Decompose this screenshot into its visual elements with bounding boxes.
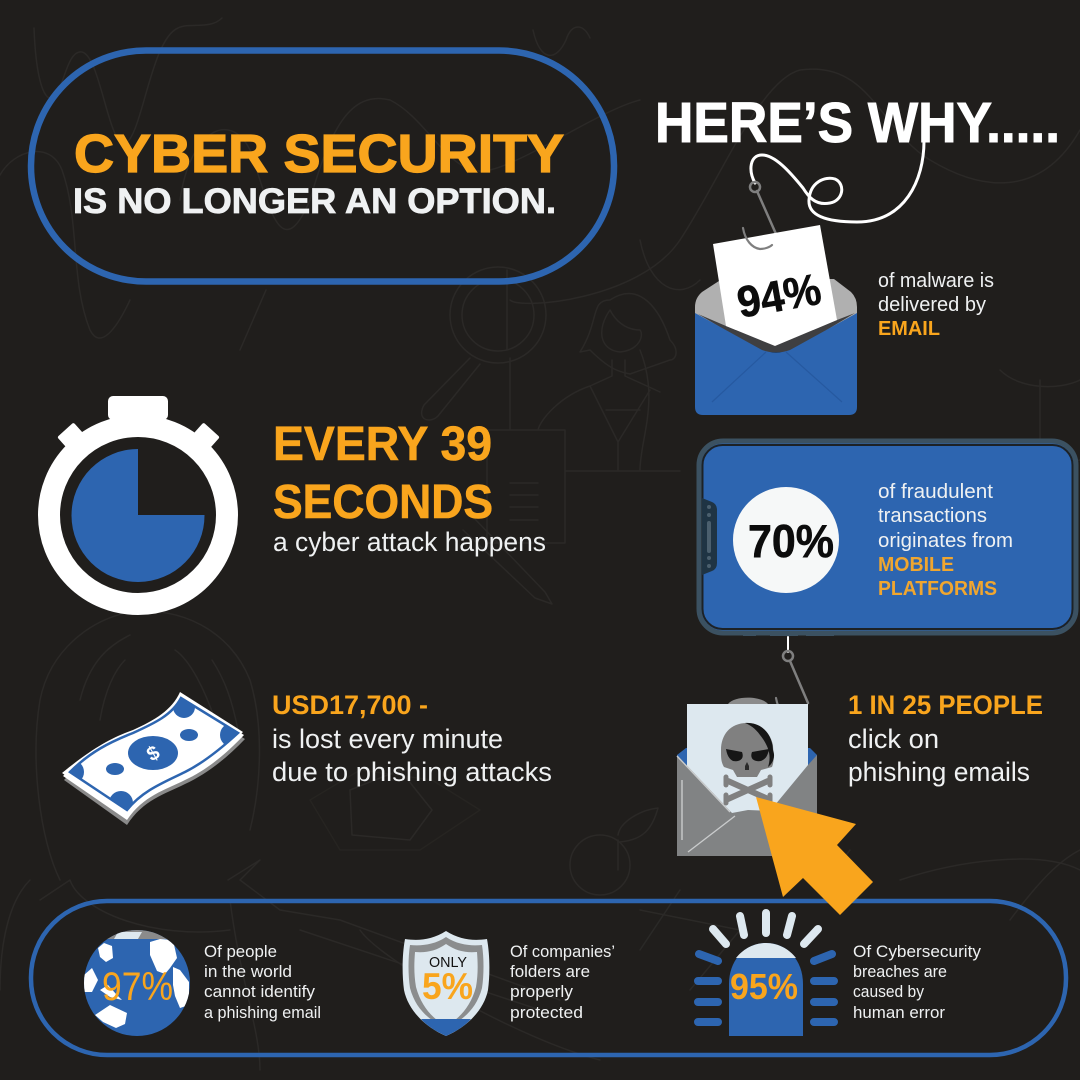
stat: shield 5% [403,931,615,1036]
caption: human error: human error [853,1003,945,1022]
heading: here's why: HERE’S WHY..... [655,91,1060,155]
title pill [31,50,614,282]
icon: shield [403,931,489,1036]
icon: cursor arrow [756,797,873,915]
icon: phone frame [699,441,1076,635]
stat: 70% [733,487,839,593]
email caption: of malware is [878,270,994,292]
stat: 94%: 94% [733,265,825,328]
fishing line and hook [750,141,924,234]
caption: companies [510,942,615,1022]
mobile caption: MOBILE [878,554,954,576]
dollar symbol: $ [143,742,164,766]
label: only: ONLY [429,954,467,971]
caption: human error: Of Cybersecurity [853,942,981,961]
frequency headline: EVERY 39 [273,418,492,471]
caption: people [204,942,321,1022]
value: 5%: 5% [422,966,473,1007]
panel: phishing money [60,690,552,825]
value: 95%: 95% [730,966,798,1007]
caption: people: in the world [204,962,292,981]
mobile caption: of fraudulent [878,481,993,503]
caption: people: cannot identify [204,982,315,1001]
icon: globe [84,930,190,1036]
money headline: USD17,700 - [272,690,428,720]
icon: banknotes [60,692,245,825]
mobile caption: PLATFORMS [878,578,997,600]
frequency caption: a cyber attack happens [273,527,546,557]
caption: human error [853,942,981,1022]
email caption [878,270,994,340]
mobile caption: transactions [878,505,987,527]
caption: human error: breaches are [853,962,947,981]
email caption: EMAIL [878,318,940,340]
icon: alarm beacon [698,913,834,1036]
title sub line: IS NO LONGER AN OPTION. [73,182,556,221]
caption: companies: folders are [510,962,590,981]
phishing headline: 1 IN 25 PEOPLE [848,690,1043,720]
phishing caption line 1: click on [848,724,939,754]
bottom pill panel [31,901,1066,1055]
mobile caption [878,481,1013,600]
mobile caption: originates from [878,530,1013,552]
caption: companies: protected [510,1003,583,1022]
money caption line 2: due to phishing attacks [272,757,552,787]
icon: envelope with tag [695,225,857,415]
caption: companies: Of companies’ [510,942,615,961]
email caption: delivered by [878,294,986,316]
money caption line 1: is lost every minute [272,724,503,754]
second fishing hook [776,637,808,719]
panel: phishing clicks [677,690,1043,915]
skull [721,723,774,803]
caption: human error: caused by [853,982,924,1001]
caption: companies: properly [510,982,574,1001]
title main line: CYBER SECURITY [74,124,564,184]
caption: people: a phishing email [204,1003,321,1022]
panel: attack frequency [49,396,546,604]
phishing caption line 2: phishing emails [848,757,1030,787]
panel: email stat [695,225,994,415]
value: 97%: 97% [102,965,173,1009]
icon: stopwatch [49,396,227,604]
stat: 70%: 70% [748,515,834,567]
panel: mobile phone stat [699,441,1076,635]
caption: people: Of people [204,942,277,961]
stat: globe 97% [84,930,321,1036]
frequency headline second line: SECONDS [273,476,493,529]
icon: skull envelope [677,698,817,856]
stat: alarm 95% [698,913,981,1036]
